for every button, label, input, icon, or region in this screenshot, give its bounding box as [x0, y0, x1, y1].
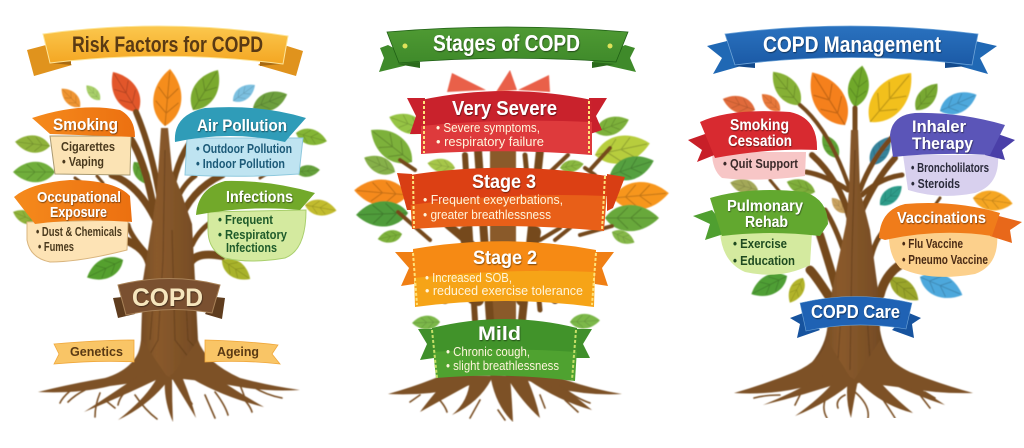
leaves: [720, 63, 1014, 307]
card: Air Pollution: • Outdoor Pollution: [196, 142, 292, 156]
ribbon: Ageing: [205, 340, 280, 364]
sign: COPD Care: [790, 296, 921, 338]
card: Vaccinations: [879, 203, 1022, 277]
roots: [388, 374, 622, 422]
card: Inhaler Therapy: • Steroids: [911, 177, 960, 191]
ribbon: Genetics: [54, 340, 134, 364]
panel: risk factors for COPD: [11, 26, 338, 422]
card: Smoking: Cigarettes: [61, 140, 115, 154]
tree: management: [720, 63, 1014, 418]
ribbon: Very Severe: [407, 91, 607, 155]
card: Infections: Infections: [226, 189, 293, 206]
ribbon: Genetics: Genetics: [70, 344, 123, 359]
ribbon: Mild: [418, 319, 592, 381]
panel: stages of COPD: [353, 27, 670, 422]
ribbon: Stage 2: [395, 241, 614, 307]
card: Pulmonary Rehab: Rehab: [745, 214, 788, 231]
ribbon: Stage 2: Stage 2: [473, 248, 537, 269]
card: Infections: Infections: [226, 241, 277, 255]
ribbon: Mild: • slight breathlessness: [446, 358, 559, 373]
ribbon: Ageing: Ageing: [217, 344, 259, 359]
card: Air Pollution: • Indoor Pollution: [196, 157, 285, 171]
card: Vaccinations: • Flu Vaccine: [902, 237, 963, 251]
card: Inhaler Therapy: • Broncholilators: [911, 161, 989, 175]
title banner: Risk Factors: [27, 26, 303, 76]
ribbon: Stage 3: • Frequent exeyerbations,: [423, 192, 563, 207]
card: Pulmonary Rehab: Pulmonary: [727, 198, 803, 215]
card: Air Pollution: Air Pollution: [197, 117, 287, 135]
title text: Risk Factors for COPD: [72, 32, 263, 57]
branches: [75, 112, 270, 270]
ribbon: Very Severe: • respiratory failure: [436, 134, 544, 149]
card: Pulmonary Rehab: • Exercise: [733, 237, 787, 251]
card: Occupational Exposure: • Fumes: [38, 240, 74, 254]
card: Smoking: [32, 107, 135, 175]
bark lines: [815, 150, 895, 378]
card: Infections: • Respiratory: [218, 228, 287, 242]
ribbon: Stage 2: • Increased SOB,: [425, 270, 512, 285]
trunk: [125, 128, 215, 380]
card: Smoking Cessation: Cessation: [728, 133, 792, 150]
title banner: COPD Management: [707, 26, 997, 74]
tree: risk factors: [11, 64, 338, 422]
card: Occupational Exposure: [14, 180, 132, 262]
sign: COPD: COPD: [132, 284, 203, 312]
card: Infections: • Frequent: [218, 213, 274, 227]
ribbon: Stage 3: [397, 168, 625, 231]
card: Occupational Exposure: Occupational: [37, 189, 121, 206]
ribbon: Stage 3: • greater breathlessness: [423, 207, 551, 222]
roots: [38, 340, 300, 422]
ribbon: Very Severe: • Severe symptoms,: [436, 120, 540, 135]
bark lines: [140, 150, 225, 378]
card: Smoking: • Vaping: [62, 155, 104, 169]
card: Air Pollution: [175, 107, 306, 176]
card: Vaccinations: Vaccinations: [897, 210, 986, 227]
card: Occupational Exposure: Exposure: [50, 204, 107, 221]
leaves: [11, 64, 338, 286]
ribbon: Stage 2: • reduced exercise tolerance: [425, 283, 583, 298]
tree: stages: [353, 70, 670, 422]
card: Pulmonary Rehab: • Education: [733, 254, 795, 268]
trunk: [807, 130, 900, 385]
sign: COPD Care: COPD Care: [811, 301, 900, 322]
title text: Stages of COPD: [433, 30, 580, 56]
ribbon: Very Severe: Very Severe: [452, 98, 557, 120]
panel: COPD management: [688, 26, 1022, 418]
card: Inhaler Therapy: [890, 113, 1015, 196]
card: Inhaler Therapy: Therapy: [912, 135, 974, 153]
title banner: Stages of COPD: [379, 27, 636, 72]
card: Inhaler Therapy: Inhaler: [912, 118, 967, 136]
card: Smoking Cessation: [688, 111, 817, 180]
card: Vaccinations: • Pneumo Vaccine: [902, 253, 988, 267]
ribbon: Mild: • Chronic cough,: [446, 344, 530, 359]
card: Infections: [196, 181, 315, 261]
card: Smoking Cessation: Smoking: [730, 117, 789, 134]
card: Pulmonary Rehab: [693, 190, 828, 275]
title text: COPD Management: [763, 32, 942, 57]
card: Occupational Exposure: • Dust & Chemicals: [36, 225, 122, 239]
sign: COPD: [113, 278, 225, 319]
branches: [770, 105, 940, 300]
card: Smoking: Smoking: [53, 116, 118, 134]
ribbon: Stage 3: Stage 3: [472, 172, 536, 193]
roots: [734, 340, 973, 418]
leaves: [353, 70, 670, 330]
card: Smoking Cessation: • Quit Support: [723, 157, 799, 171]
branches: [398, 148, 612, 330]
ribbon: Mild: Mild: [478, 324, 521, 345]
